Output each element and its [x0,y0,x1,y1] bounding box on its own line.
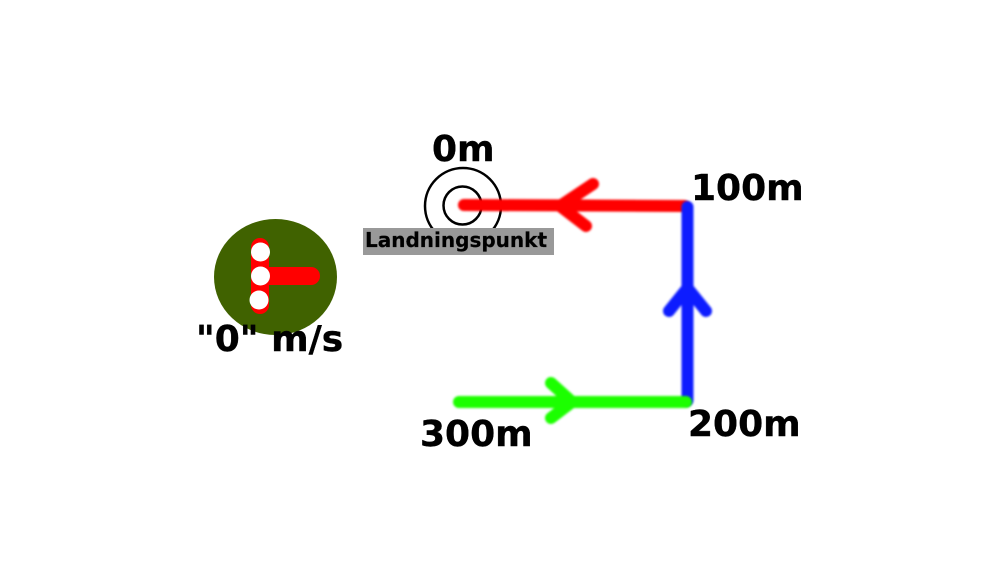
altitude label 200m: 200m [688,404,801,445]
altitude label 300m: 300m [420,414,533,455]
landing point label: Landningspunkt [365,228,547,252]
wind speed label: "0" m/s [196,319,343,360]
altitude label 0m: 0m [432,129,495,170]
icon: red wind T [250,242,311,310]
arrow: blue base leg [669,207,706,400]
arrow: green downwind leg [459,383,686,418]
icon: wind indicator disc [214,219,337,335]
arrow: red final leg [464,184,684,226]
altitude label 100m: 100m [691,168,804,209]
icon: landing target rings [425,168,501,244]
